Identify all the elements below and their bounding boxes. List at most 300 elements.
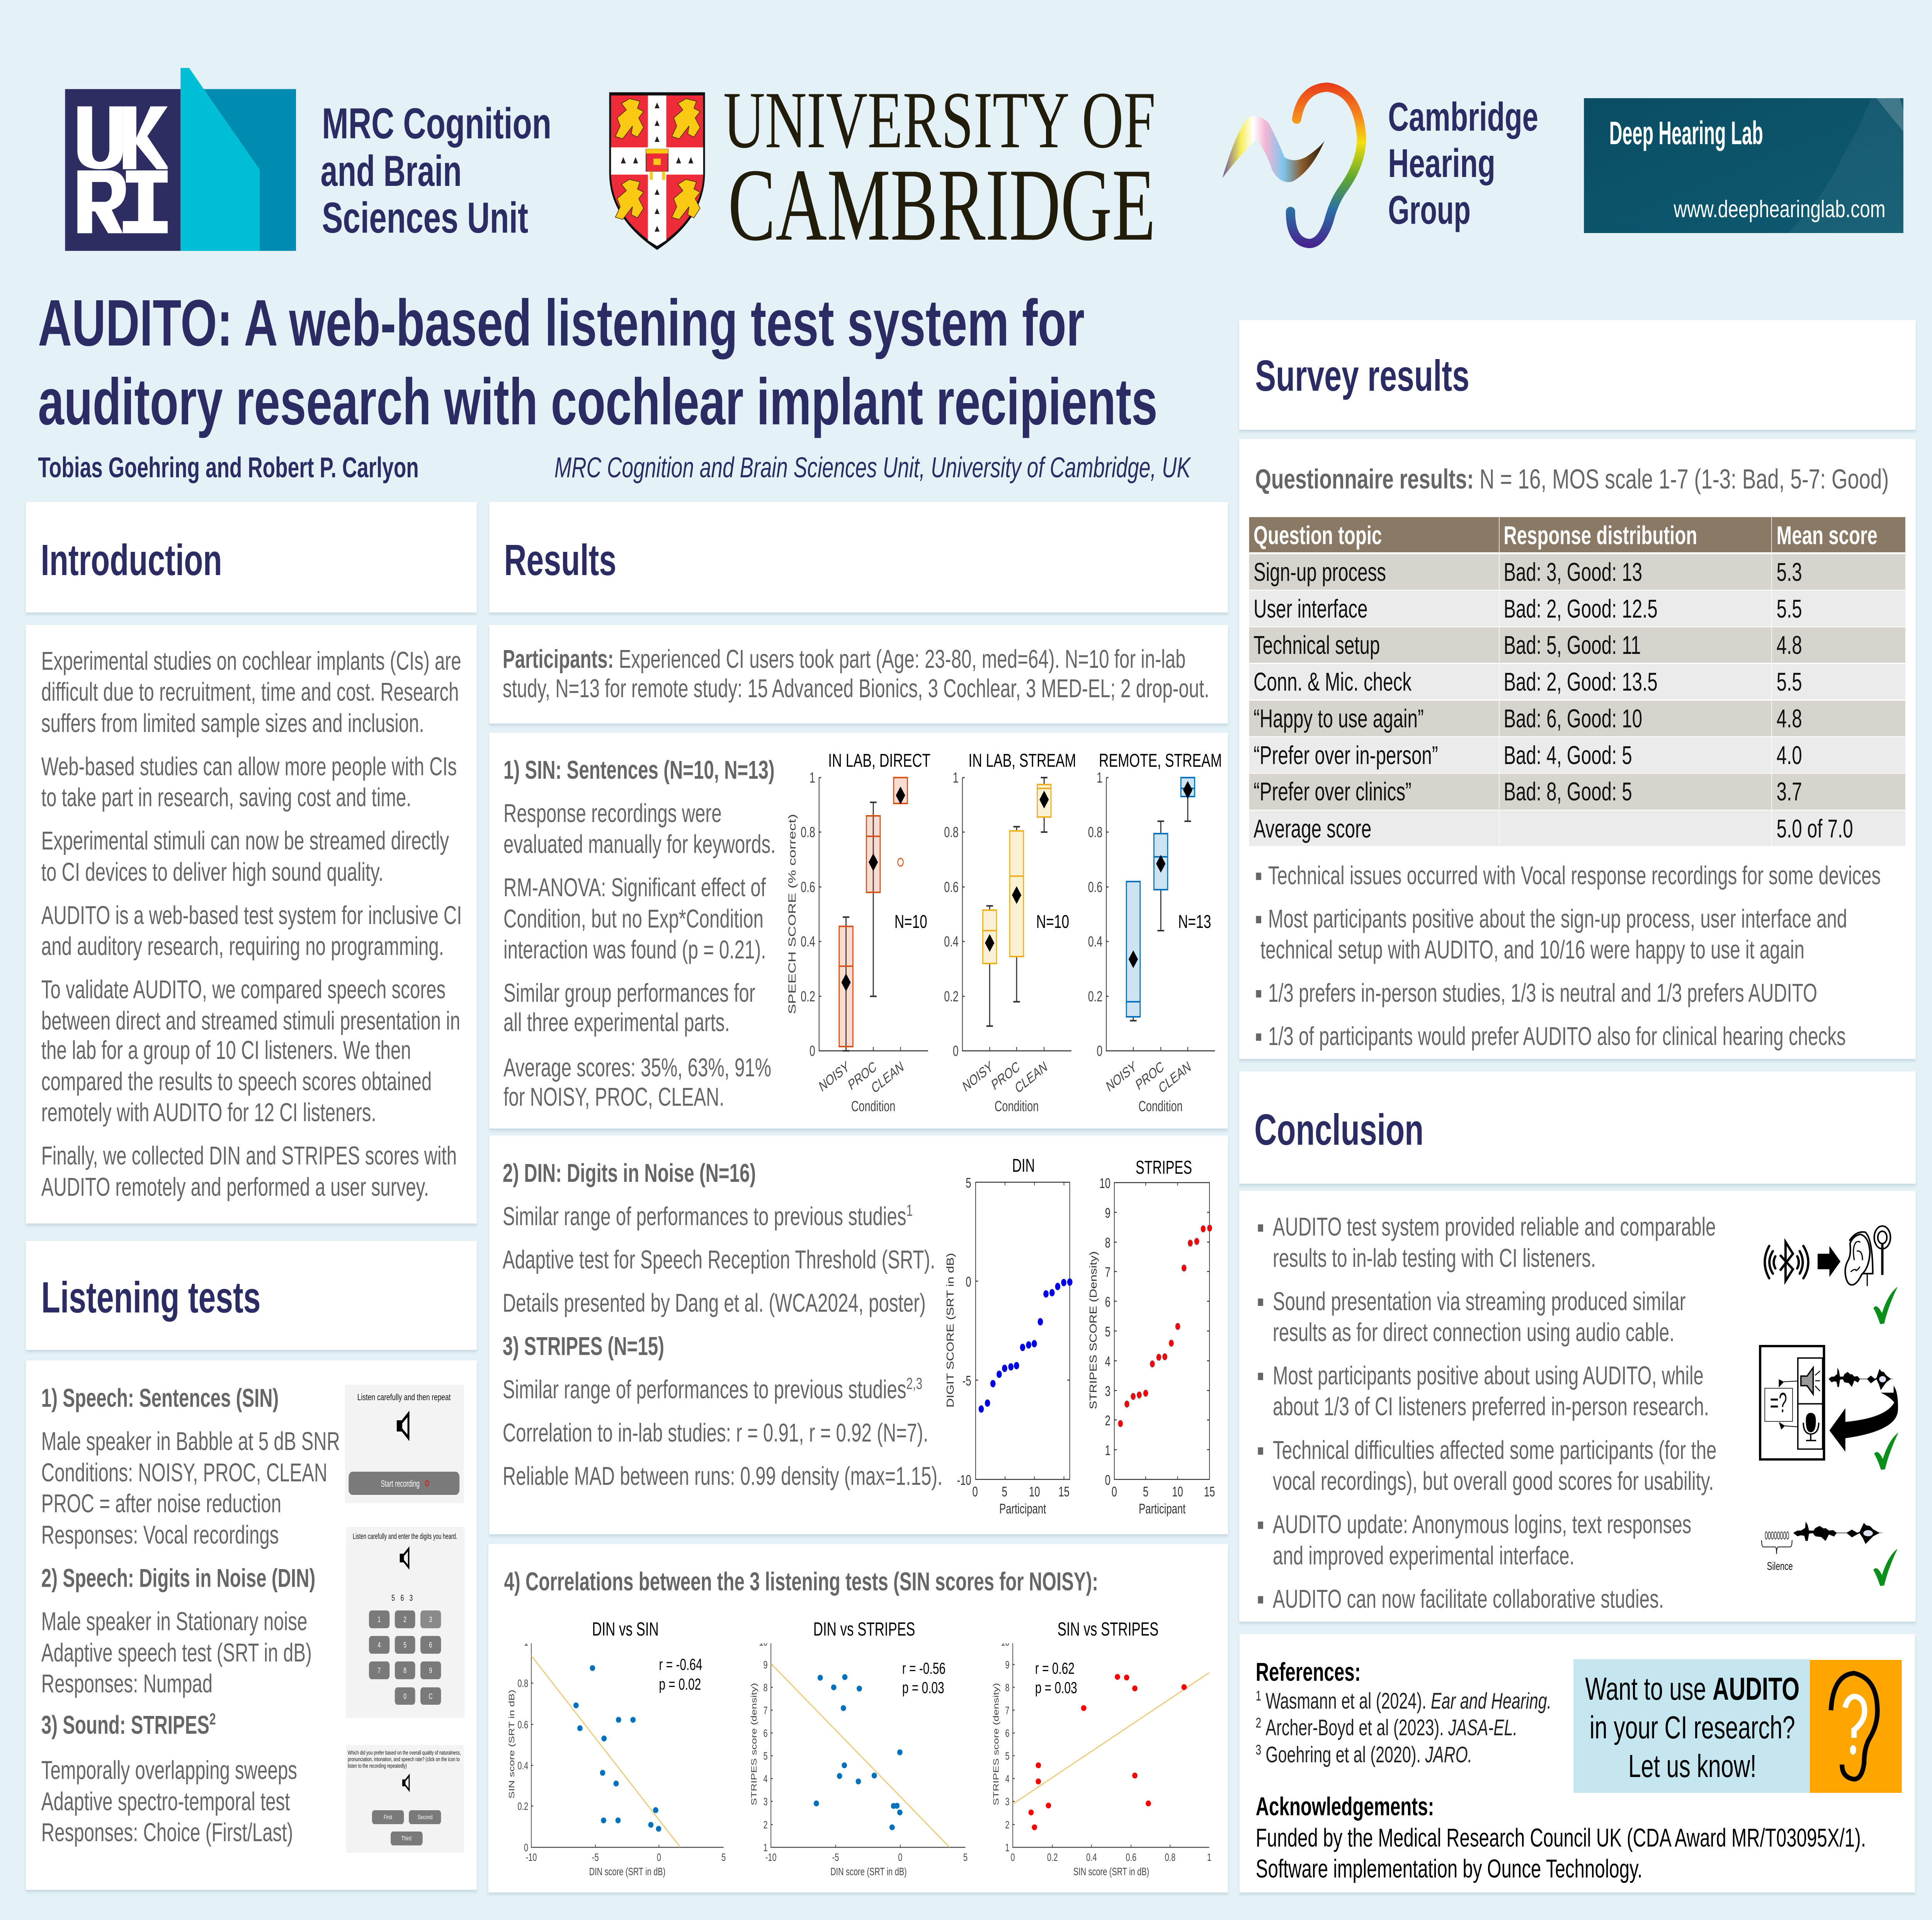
text: DIN and STRIPES findings: 1	[906, 1201, 913, 1219]
screenshot: digit test numpad: 7	[378, 1666, 381, 1675]
panel: correlations	[488, 1544, 1228, 1893]
scatter chart: STRIPES: 10	[1099, 1176, 1111, 1191]
screenshot: digit test numpad: 1	[378, 1615, 381, 1624]
text: test descriptions: Responses: Numpad	[41, 1670, 213, 1698]
panel: participants: Participants: Experienced CI users took part (Age: 23-80, med=64). N=10 for in-lab	[503, 645, 1185, 674]
logo: UKRI MRC Cognition and Brain Sciences Unit	[65, 68, 551, 251]
text: acknowledgements: Acknowledgements:	[1256, 1792, 1434, 1821]
text: references: Wasmann et al (2024). Ear and Hearing.	[1265, 1688, 1551, 1714]
box plot: in lab, direct: 0.6	[801, 878, 815, 895]
scatter chart: DIN vs SIN: -10	[526, 1852, 537, 1864]
text: conclusion bullet points: Sound presentation via streaming produced similar	[1273, 1287, 1685, 1316]
box plot: in lab, direct: PROC	[846, 1058, 878, 1093]
text: survey bullet points: 1/3 of participants would prefer AUDITO also for clinical hearing checks	[1268, 1022, 1846, 1051]
panel: introduction text: and auditory research, requiring no programming.	[41, 932, 444, 961]
scatter chart: DIN vs SIN: 5	[721, 1852, 726, 1864]
box plot: in lab, direct: 1	[810, 769, 815, 786]
text: SIN findings: interaction was found (p = 0.21).	[503, 936, 766, 964]
title: auditory research with cochlear implant recipients	[38, 365, 1158, 439]
text: conclusion bullet points: Most participants positive about using AUDITO, while	[1273, 1362, 1704, 1390]
box plot: in lab, stream: 0.2	[944, 988, 959, 1004]
scatter chart: STRIPES: 2	[1105, 1413, 1111, 1428]
text: survey bullet points: technical setup with AUDITO, and 10/16 were happy to use it again	[1260, 936, 1804, 964]
box plot: remote, stream: Condition	[1138, 1098, 1183, 1114]
scatter chart: DIN: DIGIT SCORE (SRT in dB)	[945, 1253, 956, 1408]
text: group name: Group	[1388, 188, 1471, 233]
box plot: in lab, stream: 0.8	[944, 824, 959, 840]
scatter chart: SIN vs STRIPES: STRIPES score (density)	[992, 1683, 1001, 1805]
text: conclusion bullet points: results as for direct connection using audio cable.	[1273, 1318, 1674, 1347]
panel: introduction text: AUDITO remotely and performed a user survey.	[41, 1173, 429, 1202]
scatter chart: SIN vs STRIPES: 3	[1005, 1796, 1010, 1808]
table: survey scores: Mean score	[1777, 521, 1878, 550]
scatter chart: STRIPES: 1	[1105, 1443, 1111, 1458]
text: references: References:	[1256, 1658, 1361, 1687]
scatter chart: SIN vs STRIPES: SIN vs STRIPES	[1058, 1619, 1158, 1640]
panel: introduction text: to CI devices to deliver high sound quality.	[41, 858, 383, 887]
scatter chart: DIN vs STRIPES: -5	[832, 1852, 839, 1864]
text: acknowledgements: Software implementation by Ounce Technology.	[1256, 1855, 1643, 1883]
callout: want to use AUDITO	[1573, 1659, 1902, 1793]
scatter chart: STRIPES: 7	[1105, 1265, 1111, 1280]
box plot: remote, stream: 0	[1097, 1042, 1102, 1059]
text: unit name	[321, 99, 551, 242]
scatter chart: DIN vs SIN: p = 0.02	[659, 1675, 701, 1693]
scatter chart: DIN vs STRIPES: 3	[764, 1796, 768, 1808]
text: conclusion bullet points: AUDITO test system provided reliable and comparable	[1273, 1213, 1716, 1241]
box plot: in lab, stream	[944, 750, 1076, 1114]
text: wordmark: UNIVERSITY OF	[723, 76, 1156, 165]
logo: University of Cambridge	[609, 76, 1156, 262]
scatter chart: SIN vs STRIPES: 10	[1001, 1636, 1010, 1648]
text: test descriptions: PROC = after noise reduction	[41, 1489, 281, 1518]
screenshot: digit test numpad: 5	[391, 1594, 395, 1603]
table: survey scores: Bad: 4, Good: 5	[1503, 741, 1632, 770]
scatter chart: DIN vs STRIPES: DIN score (SRT in dB)	[830, 1866, 907, 1878]
panel: introduction text: difficult due to recruitment, time and cost. Research	[41, 678, 459, 706]
panel: introduction text: between direct and streamed stimuli presentation in	[41, 1007, 460, 1035]
scatter chart: DIN vs SIN: 0.2	[517, 1801, 528, 1813]
screenshot: sentence test: Start recording	[381, 1479, 420, 1489]
box plot: remote, stream: NOISY	[1104, 1058, 1138, 1095]
scatter chart: DIN vs STRIPES: DIN vs STRIPES	[813, 1619, 915, 1640]
text: references: 2	[1256, 1715, 1261, 1731]
screenshot: digit test numpad	[346, 1527, 465, 1718]
screenshot: sentence test	[345, 1385, 464, 1503]
text: DIN and STRIPES findings: Reliable MAD between runs: 0.99 density (max=1.15).	[503, 1462, 942, 1491]
text: test descriptions: Adaptive spectro-temporal test	[41, 1787, 290, 1816]
table: survey scores: 4.0	[1777, 741, 1802, 770]
box plot: remote, stream: 0.2	[1088, 988, 1102, 1004]
scatter chart: DIN: -10	[957, 1472, 971, 1488]
icon: silence padding	[1762, 1522, 1898, 1586]
scatter chart: DIN vs STRIPES: -10	[765, 1852, 777, 1864]
text: test descriptions: 2	[209, 1710, 216, 1728]
scatter chart: STRIPES: 3	[1105, 1384, 1111, 1399]
box plot: in lab, direct: N=10	[895, 911, 927, 932]
scatter chart: DIN vs STRIPES: 1	[764, 1842, 768, 1854]
table: survey scores: 3.7	[1777, 778, 1802, 806]
text: conclusion bullet points: and improved experimental interface.	[1273, 1542, 1575, 1570]
box plot: in lab, stream: 0.4	[944, 933, 959, 950]
text: test descriptions: 2) Speech: Digits in Noise (DIN)	[41, 1564, 315, 1593]
icon: vocal recording comparison	[1760, 1346, 1898, 1470]
text: conclusion bullet points: AUDITO update: Anonymous logins, text responses	[1273, 1510, 1691, 1539]
text: references: Goehring et al (2020). JARO.	[1265, 1742, 1472, 1767]
scatter chart: DIN vs SIN: DIN score (SRT in dB)	[589, 1866, 665, 1878]
box plot: in lab, stream: 0	[953, 1042, 959, 1059]
table: survey scores: 5.3	[1777, 558, 1802, 587]
scatter chart: DIN: 15	[1058, 1484, 1070, 1500]
scatter chart: DIN vs SIN: 1	[524, 1636, 528, 1648]
text: test descriptions: Responses: Choice (First/Last)	[41, 1818, 293, 1847]
text: survey bullet points: Most participants positive about the sign-up process, user interface and	[1268, 905, 1847, 933]
icon: silence padding: 00000000	[1765, 1530, 1789, 1542]
box plot: remote, stream: N=13	[1178, 911, 1211, 932]
text: SIN findings: Response recordings were	[503, 799, 722, 828]
table: survey scores: “Happy to use again”	[1253, 705, 1424, 733]
text: group name	[1388, 95, 1538, 233]
icon: rainbow ear	[1223, 87, 1362, 243]
scatter chart: DIN: Participant	[999, 1501, 1046, 1517]
scatter chart: STRIPES: 9	[1105, 1205, 1111, 1221]
text: DIN and STRIPES findings: 2) DIN: Digits in Noise (N=16)	[503, 1159, 756, 1188]
scatter chart: SIN vs STRIPES: 0.4	[1086, 1852, 1097, 1864]
panel: introduction text: remotely with AUDITO for 12 CI listeners.	[41, 1098, 376, 1127]
panel: introduction text	[26, 625, 477, 1224]
screenshot: stripes choice test: Second	[418, 1813, 432, 1820]
screenshot: digit test numpad: 6	[429, 1641, 432, 1649]
screenshot: digit test numpad: 9	[429, 1666, 432, 1675]
box plot: in lab, direct: Condition	[851, 1098, 895, 1114]
icon: vocal recording comparison: =?	[1770, 1387, 1787, 1418]
box plot: in lab, direct: 0.8	[801, 824, 815, 840]
panel: DIN and STRIPES results	[489, 1135, 1228, 1534]
panel: conclusion	[1239, 1191, 1916, 1622]
box plot: in lab, stream: 0.6	[944, 878, 959, 895]
box plot: in lab, direct	[801, 750, 930, 1114]
panel: survey results heading: Survey results	[1255, 351, 1469, 400]
text: test descriptions: 1) Speech: Sentences (SIN)	[41, 1384, 279, 1413]
screenshot: digit test numpad: 3	[409, 1594, 413, 1603]
scatter chart: STRIPES: Participant	[1139, 1501, 1185, 1517]
screenshot: digit test numpad: 2	[403, 1615, 406, 1624]
scatter chart: STRIPES: STRIPES	[1136, 1157, 1192, 1178]
text: acknowledgements: Funded by the Medical Research Council UK (CDA Award MR/T03095X/1).	[1256, 1824, 1866, 1852]
text: test descriptions: Conditions: NOISY, PROC, CLEAN	[41, 1459, 327, 1487]
text: references	[1256, 1658, 1551, 1767]
scatter chart: STRIPES: 15	[1204, 1484, 1215, 1500]
scatter chart: DIN vs STRIPES: 7	[764, 1705, 768, 1717]
box plot: remote, stream: PROC	[1134, 1058, 1166, 1093]
scatter chart: SIN vs STRIPES	[992, 1619, 1211, 1878]
scatter chart: DIN vs SIN: 0	[657, 1852, 661, 1864]
scatter chart: SIN vs STRIPES: p = 0.03	[1035, 1678, 1077, 1697]
box plot: in lab, stream: CLEAN	[1013, 1058, 1049, 1096]
table: survey scores: Bad: 8, Good: 5	[1503, 778, 1632, 806]
text: questionnaire summary: Questionnaire results: N = 16, MOS scale 1-7 (1-3: Bad, 5-7: Good)	[1255, 464, 1889, 495]
text: SIN findings: 1) SIN: Sentences (N=10, N=13)	[503, 756, 775, 785]
scatter chart: DIN vs SIN: DIN vs SIN	[592, 1619, 659, 1640]
screenshot: digit test numpad: 3	[429, 1615, 432, 1624]
screenshot: digit test numpad: 0	[403, 1692, 406, 1701]
scatter chart: STRIPES: STRIPES SCORE (Density)	[1088, 1251, 1099, 1409]
screenshot: digit test numpad: C	[429, 1692, 433, 1701]
scatter chart: DIN vs SIN: -5	[592, 1852, 599, 1864]
panel: introduction text: AUDITO is a web-based test system for inclusive CI	[41, 901, 462, 930]
text: SIN findings: Condition, but no Exp*Condition	[503, 905, 764, 933]
scatter chart: SIN vs STRIPES: 0.6	[1126, 1852, 1136, 1864]
text: unit name: Sciences Unit	[322, 194, 528, 242]
text: acknowledgements	[1256, 1792, 1866, 1883]
screenshot: stripes choice test: Which did you prefer based on the overall quality of naturalness,	[348, 1750, 461, 1756]
table: survey scores: “Prefer over in-person”	[1253, 741, 1438, 770]
text: references: Archer-Boyd et al (2023). JASA-EL.	[1265, 1715, 1517, 1740]
table: survey scores: 5.5	[1777, 595, 1802, 623]
box plot: in lab, stream: 1	[953, 769, 959, 786]
scatter chart: SIN vs STRIPES: 0	[1011, 1852, 1015, 1864]
affiliation: MRC Cognition and Brain Sciences Unit, University of Cambridge, UK	[554, 451, 1192, 483]
table: survey scores: Bad: 5, Good: 11	[1503, 631, 1641, 660]
scatter chart: DIN: 10	[1029, 1484, 1040, 1500]
scatter chart: DIN vs STRIPES: 10	[759, 1636, 768, 1648]
panel: conclusion heading	[1239, 1071, 1916, 1184]
table: survey scores: Bad: 3, Good: 13	[1503, 558, 1642, 587]
box plot: in lab, direct: CLEAN	[869, 1058, 905, 1096]
panel: introduction text: To validate AUDITO, we compared speech scores	[41, 975, 446, 1004]
scatter chart: DIN: -5	[963, 1373, 971, 1389]
text: conclusion bullet points: about 1/3 of CI listeners preferred in-person research.	[1273, 1392, 1709, 1421]
table: survey scores: User interface	[1253, 595, 1368, 623]
text: survey bullet points: Technical issues occurred with Vocal response recordings for some devices	[1268, 861, 1881, 890]
text: DIN and STRIPES findings: Adaptive test for Speech Reception Threshold (SRT).	[503, 1246, 935, 1274]
panel: results heading: Results	[504, 535, 616, 584]
scatter chart: DIN vs STRIPES	[750, 1619, 968, 1878]
y axis label: speech score: SPEECH SCORE (% correct)	[786, 814, 798, 1014]
text: SIN findings	[503, 756, 776, 1111]
scatter chart: SIN vs STRIPES: SIN score (SRT in dB)	[1073, 1866, 1149, 1878]
scatter chart: DIN vs STRIPES: p = 0.03	[902, 1678, 944, 1697]
panel: participants	[489, 625, 1228, 723]
scatter chart: STRIPES: 5	[1105, 1324, 1111, 1340]
scatter chart: DIN vs STRIPES: 8	[764, 1682, 768, 1694]
scatter chart: STRIPES: 0	[1105, 1472, 1111, 1488]
table: survey scores: Response distribution	[1503, 521, 1697, 550]
callout: want to use AUDITO: in your CI research?	[1590, 1710, 1795, 1745]
scatter chart: STRIPES: 0	[1112, 1484, 1117, 1500]
scatter chart: SIN vs STRIPES: 1	[1005, 1842, 1010, 1854]
text: DIN and STRIPES findings: Similar range of performances to previous studies	[503, 1202, 906, 1231]
scatter chart: DIN vs STRIPES: r = -0.56	[902, 1659, 946, 1677]
text: group name: Hearing	[1388, 141, 1495, 186]
scatter chart: SIN vs STRIPES: 9	[1005, 1659, 1010, 1671]
text: DIN and STRIPES findings	[503, 1159, 942, 1491]
text: conclusion bullet points	[1258, 1213, 1716, 1614]
text: SIN findings: evaluated manually for keywords.	[503, 830, 776, 859]
text: DIN and STRIPES findings: Similar range of performances to previous studies	[503, 1375, 906, 1404]
text: test descriptions	[41, 1384, 340, 1847]
table: survey scores: 4.8	[1777, 631, 1802, 660]
icon: UKRI mark	[65, 68, 296, 251]
text: test descriptions: Adaptive speech test (SRT in dB)	[41, 1639, 312, 1667]
box plot: in lab, stream: NOISY	[961, 1058, 995, 1095]
screenshot: digit test numpad: 8	[403, 1666, 406, 1675]
panel: introduction heading: Introduction	[41, 535, 222, 584]
panel: introduction text: suffers from limited sample sizes and inclusion.	[41, 709, 424, 738]
scatter chart: STRIPES: 5	[1143, 1484, 1148, 1500]
scatter chart: DIN: 5	[1002, 1484, 1007, 1500]
box plot: remote, stream: 0.6	[1088, 878, 1102, 895]
panel: introduction text: the lab for a group of 10 CI listeners. We then	[41, 1036, 411, 1065]
scatter chart: DIN vs STRIPES: 4	[764, 1773, 768, 1785]
screenshot: stripes choice test	[346, 1745, 464, 1853]
box plot: in lab, direct: 0.2	[801, 988, 815, 1004]
scatter chart: DIN vs SIN: 0	[524, 1842, 528, 1854]
panel: introduction text: Experimental stimuli can now be streamed directly	[41, 827, 449, 855]
scatter chart: DIN vs STRIPES: STRIPES score (density)	[750, 1683, 759, 1805]
text: unit name: MRC Cognition	[322, 99, 551, 148]
callout: want to use AUDITO: Let us know!	[1628, 1748, 1757, 1784]
text: conclusion bullet points: results to in-lab testing with CI listeners.	[1273, 1244, 1596, 1273]
icon: Cambridge crest	[609, 92, 705, 250]
scatter chart: SIN vs STRIPES: 0.2	[1047, 1852, 1058, 1864]
logo: Deep Hearing Lab	[1584, 98, 1903, 233]
box plot: remote, stream: 1	[1097, 769, 1102, 786]
panel: introduction text: Web-based studies can allow more people with CIs	[41, 752, 457, 781]
scatter chart: DIN vs STRIPES: 6	[764, 1728, 768, 1740]
text: SIN findings: Similar group performances for	[503, 979, 755, 1008]
table: survey scores: Average score	[1253, 815, 1371, 843]
icon: silence padding: Silence	[1767, 1560, 1793, 1573]
scatter chart: DIN: 0	[972, 1484, 978, 1500]
screenshot: stripes choice test: listen to the recording repeatedly)	[348, 1763, 407, 1769]
panel: results heading	[489, 502, 1228, 613]
table: survey scores: 5.5	[1777, 668, 1802, 696]
scatter chart: SIN vs STRIPES: 8	[1005, 1682, 1010, 1694]
title	[38, 286, 1158, 439]
box plot: remote, stream: CLEAN	[1156, 1058, 1193, 1096]
scatter chart: DIN vs SIN: 0.8	[517, 1678, 528, 1690]
scatter chart: DIN vs SIN: 0.4	[517, 1760, 528, 1772]
text: group name: Cambridge	[1388, 95, 1538, 140]
scatter chart: DIN vs SIN: SIN score (SRT in dB)	[508, 1690, 516, 1799]
text: survey bullet points: 1/3 prefers in-person studies, 1/3 is neutral and 1/3 prefers AUDITO	[1268, 979, 1817, 1008]
scatter chart: DIN vs SIN: r = -0.64	[659, 1655, 702, 1673]
box plot: in lab, stream: Condition	[995, 1098, 1039, 1114]
text: survey bullet points	[1256, 861, 1881, 1051]
scatter chart: DIN vs SIN: 0.6	[517, 1719, 528, 1731]
icon: ear question mark	[1831, 1673, 1878, 1779]
table: survey scores: “Prefer over clinics”	[1253, 778, 1412, 806]
scatter chart: SIN vs STRIPES: 6	[1005, 1728, 1010, 1740]
screenshot: stripes choice test: Third	[401, 1835, 412, 1842]
text: SIN findings: all three experimental parts.	[503, 1008, 730, 1037]
scatter chart: SIN vs STRIPES: 1	[1207, 1852, 1211, 1864]
table: survey scores: Question topic	[1253, 521, 1382, 550]
text: SIN findings: for NOISY, PROC, CLEAN.	[503, 1083, 724, 1111]
screenshot: digit test numpad: 4	[378, 1641, 381, 1649]
scatter chart: DIN: DIN	[1012, 1155, 1035, 1176]
text: wordmark: CAMBRIDGE	[728, 148, 1156, 262]
text: test descriptions: 3) Sound: STRIPES	[41, 1711, 209, 1740]
text: conclusion bullet points: Technical difficulties affected some participants (for the	[1273, 1436, 1716, 1465]
table: survey scores: Bad: 2, Good: 12.5	[1503, 595, 1658, 623]
scatter chart: DIN vs SIN	[508, 1619, 726, 1878]
scatter chart: SIN vs STRIPES: 2	[1005, 1819, 1010, 1831]
authors: Tobias Goehring and Robert P. Carlyon	[38, 451, 419, 483]
panel: listening tests	[26, 1360, 477, 1890]
box plot: remote, stream: REMOTE, STREAM	[1099, 750, 1222, 771]
text: wordmark	[723, 76, 1156, 262]
scatter chart: STRIPES: 8	[1105, 1235, 1111, 1251]
table: survey scores: Bad: 6, Good: 10	[1503, 705, 1642, 733]
panel: introduction text: Experimental studies on cochlear implants (CIs) are	[41, 647, 461, 676]
panel: questionnaire results	[1239, 439, 1916, 1059]
text: test descriptions: Responses: Vocal recordings	[41, 1521, 279, 1549]
panel: introduction text: compared the results to speech scores obtained	[41, 1067, 432, 1096]
table: survey scores: Technical setup	[1253, 631, 1380, 660]
scatter chart: SIN vs STRIPES: 7	[1005, 1705, 1010, 1717]
scatter chart: STRIPES: 10	[1172, 1484, 1183, 1500]
box plot: remote, stream: 0.4	[1088, 933, 1102, 950]
screenshot: stripes choice test: First	[384, 1813, 392, 1820]
text: conclusion bullet points: AUDITO can now facilitate collaborative studies.	[1273, 1585, 1664, 1614]
logo: Deep Hearing Lab: Deep Hearing Lab	[1609, 115, 1763, 151]
text: test descriptions: Male speaker in Stationary noise	[41, 1607, 307, 1636]
text: references: 3	[1256, 1742, 1261, 1758]
box plot: in lab, direct: NOISY	[817, 1058, 851, 1095]
text: references: 1	[1256, 1688, 1261, 1704]
panel: listening tests heading	[26, 1241, 477, 1350]
scatter chart: DIN vs STRIPES: 5	[963, 1852, 968, 1864]
screenshot: stripes choice test: pronunciation, intonation, and speech rate? (click on the icon to	[348, 1756, 460, 1762]
scatter chart: DIN vs STRIPES: 9	[764, 1659, 768, 1671]
text: DIN and STRIPES findings: Correlation to in-lab studies: r = 0.91, r = 0.92 (N=7).	[503, 1419, 928, 1447]
logo: Cambridge Hearing Group	[1223, 87, 1538, 243]
box plot: in lab, direct: 0.4	[801, 933, 815, 950]
text: test descriptions: Temporally overlapping sweeps	[41, 1756, 297, 1785]
scatter chart: DIN vs STRIPES: 2	[764, 1819, 768, 1831]
text: SIN findings: RM-ANOVA: Significant effect of	[503, 873, 766, 902]
text: DIN and STRIPES findings: 2,3	[906, 1374, 922, 1392]
panel: listening tests heading: Listening tests	[41, 1273, 261, 1322]
panel: introduction text: Finally, we collected DIN and STRIPES scores with	[41, 1142, 457, 1170]
screenshot: digit test numpad: Listen carefully and enter the digits you heard.	[353, 1532, 457, 1541]
text: DIN and STRIPES findings: Details presented by Dang et al. (WCA2024, poster)	[503, 1289, 926, 1317]
text: DIN and STRIPES findings: 3) STRIPES (N=15)	[503, 1332, 664, 1361]
scatter chart: SIN vs STRIPES: r = 0.62	[1035, 1659, 1075, 1677]
text: SIN findings: Average scores: 35%, 63%, 91%	[503, 1054, 771, 1082]
scatter chart: DIN	[945, 1155, 1072, 1517]
panel: introduction heading	[26, 502, 477, 613]
panel: participants: study, N=13 for remote study: 15 Advanced Bionics, 3 Cochlear, 3 MED-EL; 2 drop-out.	[503, 674, 1209, 703]
scatter chart: SIN vs STRIPES: 0.8	[1165, 1852, 1175, 1864]
logo: Deep Hearing Lab: www.deephearinglab.com	[1673, 196, 1886, 223]
table: survey scores: Conn. & Mic. check	[1253, 668, 1412, 696]
panel: references and acknowledgements	[1240, 1634, 1915, 1893]
scatter chart: STRIPES: 6	[1105, 1294, 1111, 1310]
box plot: in lab, stream: N=10	[1036, 911, 1069, 932]
box plot: remote, stream	[1088, 750, 1222, 1114]
scatter chart: DIN vs STRIPES: 0	[898, 1852, 902, 1864]
table: survey scores	[1249, 517, 1905, 846]
title: AUDITO: A web-based listening test system for	[38, 286, 1085, 360]
table: survey scores: Sign-up process	[1253, 558, 1386, 587]
screenshot: sentence test: Listen carefully and then repeat	[357, 1392, 451, 1403]
callout: want to use AUDITO: Want to use AUDITO	[1585, 1671, 1799, 1707]
screenshot: digit test numpad: 5	[403, 1641, 406, 1649]
box plot: in lab, stream: PROC	[990, 1058, 1022, 1093]
